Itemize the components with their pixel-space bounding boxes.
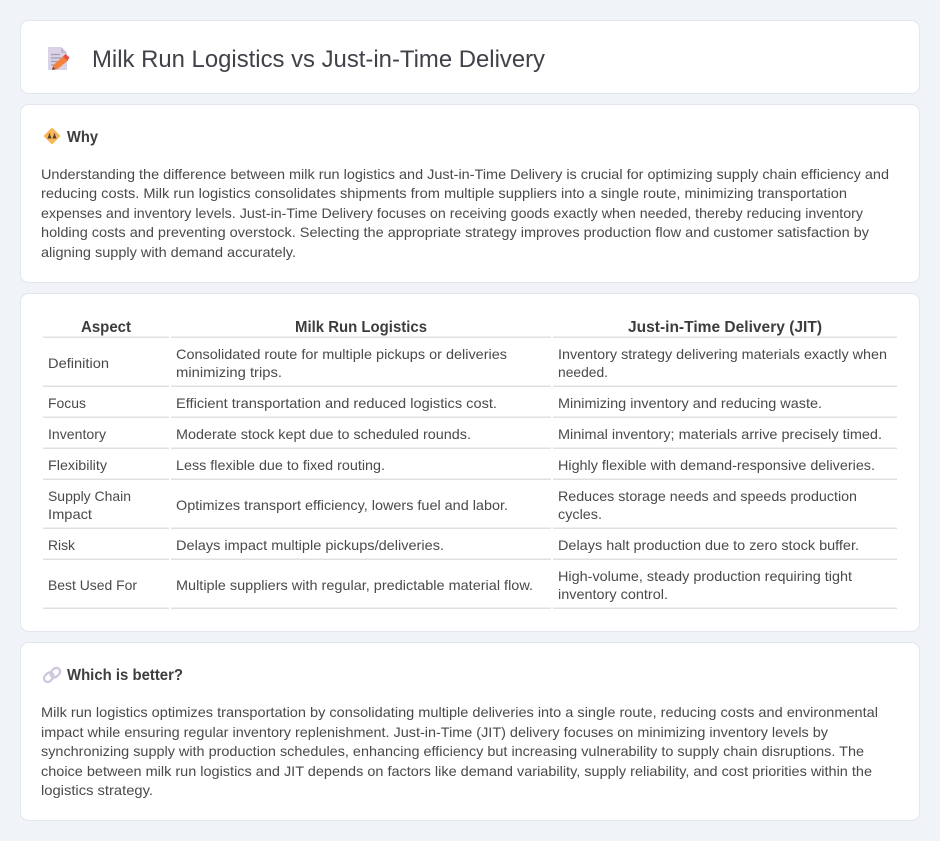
table row: best used for: inventory control. [558, 586, 668, 602]
table row: definition: Consolidated route for multiple pickups or deliveries [176, 346, 507, 362]
text block: why paragraph: reducing costs. Milk run logistics consolidates shipments from multiple suppliers into a single route, minimizing transportation [41, 185, 847, 201]
text block: why paragraph: Understanding the difference between milk run logistics and Just-in-Time Delivery is crucial for optimizing supply chain efficiency and [41, 166, 889, 182]
heading: which is better: Which is better? [67, 667, 183, 684]
text block: which is better paragraph: impact while ensuring regular inventory replenishment. Just-in-Time (JIT) delivery focuses on minimizing inventory levels by [41, 724, 828, 740]
table row: focus: Minimizing inventory and reducing waste. [558, 395, 822, 411]
text block: why paragraph: holding costs and preventing overstock. Selecting the appropriate strategy improves production flow and customer satisfaction by [41, 224, 869, 240]
table row: inventory: Minimal inventory; materials arrive precisely timed. [558, 426, 882, 442]
text block: which is better paragraph: logistics strategy. [41, 782, 153, 798]
table row: inventory: Moderate stock kept due to scheduled rounds. [176, 426, 471, 442]
table row: risk: Risk [48, 537, 76, 553]
icon: chain link [42, 666, 62, 684]
table row: risk [48, 537, 859, 553]
table row: supply chain impact: Optimizes transport efficiency, lowers fuel and labor. [176, 497, 508, 513]
table row: inventory [48, 426, 882, 442]
table row: supply chain impact: Impact [48, 506, 92, 522]
text block: which is better paragraph: Milk run logistics optimizes transportation by consolidating multiple deliveries into a single route, reducing costs and environmental [41, 704, 878, 720]
table row: definition: Inventory strategy delivering materials exactly when [558, 346, 887, 362]
table row: inventory: Inventory [48, 426, 106, 442]
table header row: Aspect [81, 319, 132, 336]
heading: why: Why [67, 129, 98, 146]
table row: risk: Delays halt production due to zero stock buffer. [558, 537, 859, 553]
table row: supply chain impact: Reduces storage needs and speeds production [558, 488, 857, 504]
table row: focus: Efficient transportation and reduced logistics cost. [176, 395, 497, 411]
text block: why paragraph: expenses and inventory levels. Just-in-Time Delivery focuses on receiving goods exactly when needed, thereby reducing inventory [41, 205, 863, 221]
table row: definition [48, 346, 887, 380]
table row: focus: Focus [48, 395, 86, 411]
table row: best used for [48, 568, 852, 602]
table row: flexibility: Less flexible due to fixed routing. [176, 457, 385, 473]
table row: focus [48, 395, 822, 411]
table row: definition: needed. [558, 364, 608, 380]
table row: best used for: Multiple suppliers with regular, predictable material flow. [176, 577, 533, 593]
table row: definition: minimizing trips. [176, 364, 282, 380]
table header row: Milk Run Logistics [295, 319, 427, 336]
text block: which is better paragraph: synchronizing supply with production schedules, enhancing efficiency but increasing vulnerability to supply chain disruptions. The [41, 743, 864, 759]
icon: diamond warning sign [44, 128, 60, 144]
text block: why paragraph: aligning supply with demand accurately. [41, 244, 296, 260]
table row: definition: Definition [48, 355, 109, 371]
table row: flexibility [48, 457, 875, 473]
table row: supply chain impact: Supply Chain [48, 488, 131, 504]
panel: which is better [20, 642, 920, 820]
table row: risk: Delays impact multiple pickups/deliveries. [176, 537, 444, 553]
text block: why paragraph [41, 166, 889, 260]
table row: supply chain impact: cycles. [558, 506, 602, 522]
panel: comparison table [20, 294, 920, 632]
text block: which is better paragraph [41, 704, 878, 798]
panel: header [20, 20, 920, 94]
table row: flexibility: Flexibility [48, 457, 107, 473]
text block: which is better paragraph: choice between milk run logistics and JIT depends on factors like demand variability, supply reliability, and cost priorities within the [41, 763, 872, 779]
table header row [81, 319, 822, 336]
panel: why [20, 104, 920, 282]
table row: flexibility: Highly flexible with demand-responsive deliveries. [558, 457, 875, 473]
table row: best used for: High-volume, steady production requiring tight [558, 568, 852, 584]
icon: memo with pencil [48, 47, 70, 70]
table header row: Just-in-Time Delivery (JIT) [628, 319, 822, 336]
title: Milk Run Logistics vs Just-in-Time Delivery [92, 46, 545, 73]
table row: best used for: Best Used For [48, 577, 137, 593]
table row: supply chain impact [48, 488, 857, 522]
